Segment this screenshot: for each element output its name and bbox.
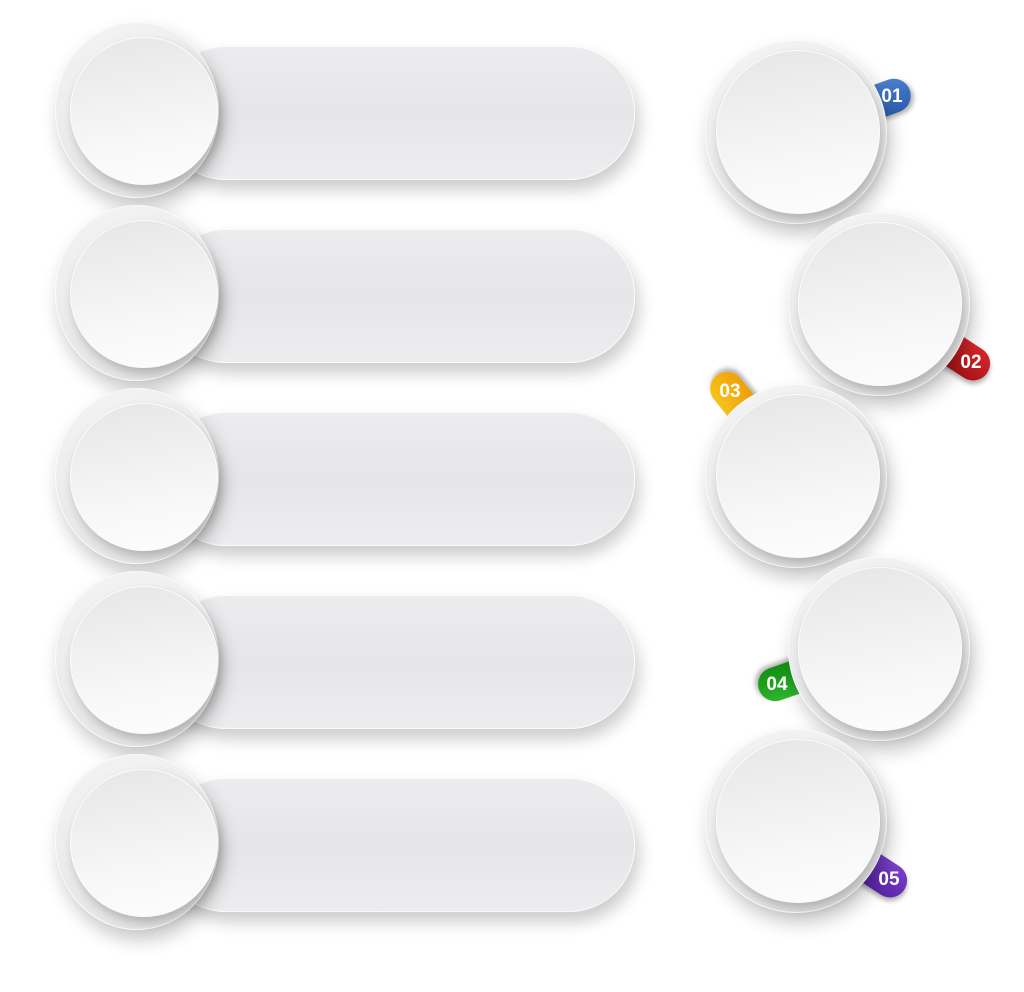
circle inner 2 (70, 220, 218, 368)
row 5 (50, 754, 646, 948)
circle inner 3 (70, 403, 218, 551)
bar 1 (160, 46, 635, 180)
bar 3 (160, 412, 635, 546)
inner circle (798, 567, 962, 731)
circle inner 4 (70, 586, 218, 734)
circle outer 4 (55, 571, 219, 747)
circle outer 2 (55, 205, 219, 381)
outer circle (705, 729, 887, 913)
badge 03 (700, 366, 900, 586)
label 05: 05 (878, 869, 900, 890)
outer circle (705, 40, 887, 224)
outer circle (788, 212, 970, 396)
badge 05 (700, 730, 910, 932)
badge 02 (784, 213, 993, 414)
badge 01 (700, 41, 916, 242)
inner circle (716, 394, 880, 558)
row 1 (50, 23, 646, 212)
bar 4 (160, 595, 635, 729)
tag 03 (703, 365, 810, 486)
circle inner 1 (70, 37, 218, 185)
circle outer 3 (55, 388, 219, 564)
circle outer 5 (55, 754, 219, 930)
inner circle (798, 222, 962, 386)
outer circle (705, 384, 887, 568)
row 3 (50, 388, 646, 578)
inner circle (716, 739, 880, 903)
inner circle (716, 50, 880, 214)
circle outer 1 (55, 22, 219, 198)
circle inner 5 (70, 769, 218, 917)
tag 01 (791, 74, 916, 147)
tag 02 (871, 289, 997, 387)
bar 2 (160, 229, 635, 363)
row 4 (50, 571, 646, 760)
tag 05 (788, 806, 914, 904)
label 01: 01 (881, 86, 903, 107)
bar 5 (160, 778, 635, 912)
label 04: 04 (766, 674, 788, 695)
row 2 (50, 205, 646, 394)
label 02: 02 (960, 352, 982, 373)
badge 04 (752, 558, 982, 760)
tag 04 (753, 632, 886, 706)
label 03: 03 (719, 381, 741, 402)
outer circle (788, 557, 970, 741)
